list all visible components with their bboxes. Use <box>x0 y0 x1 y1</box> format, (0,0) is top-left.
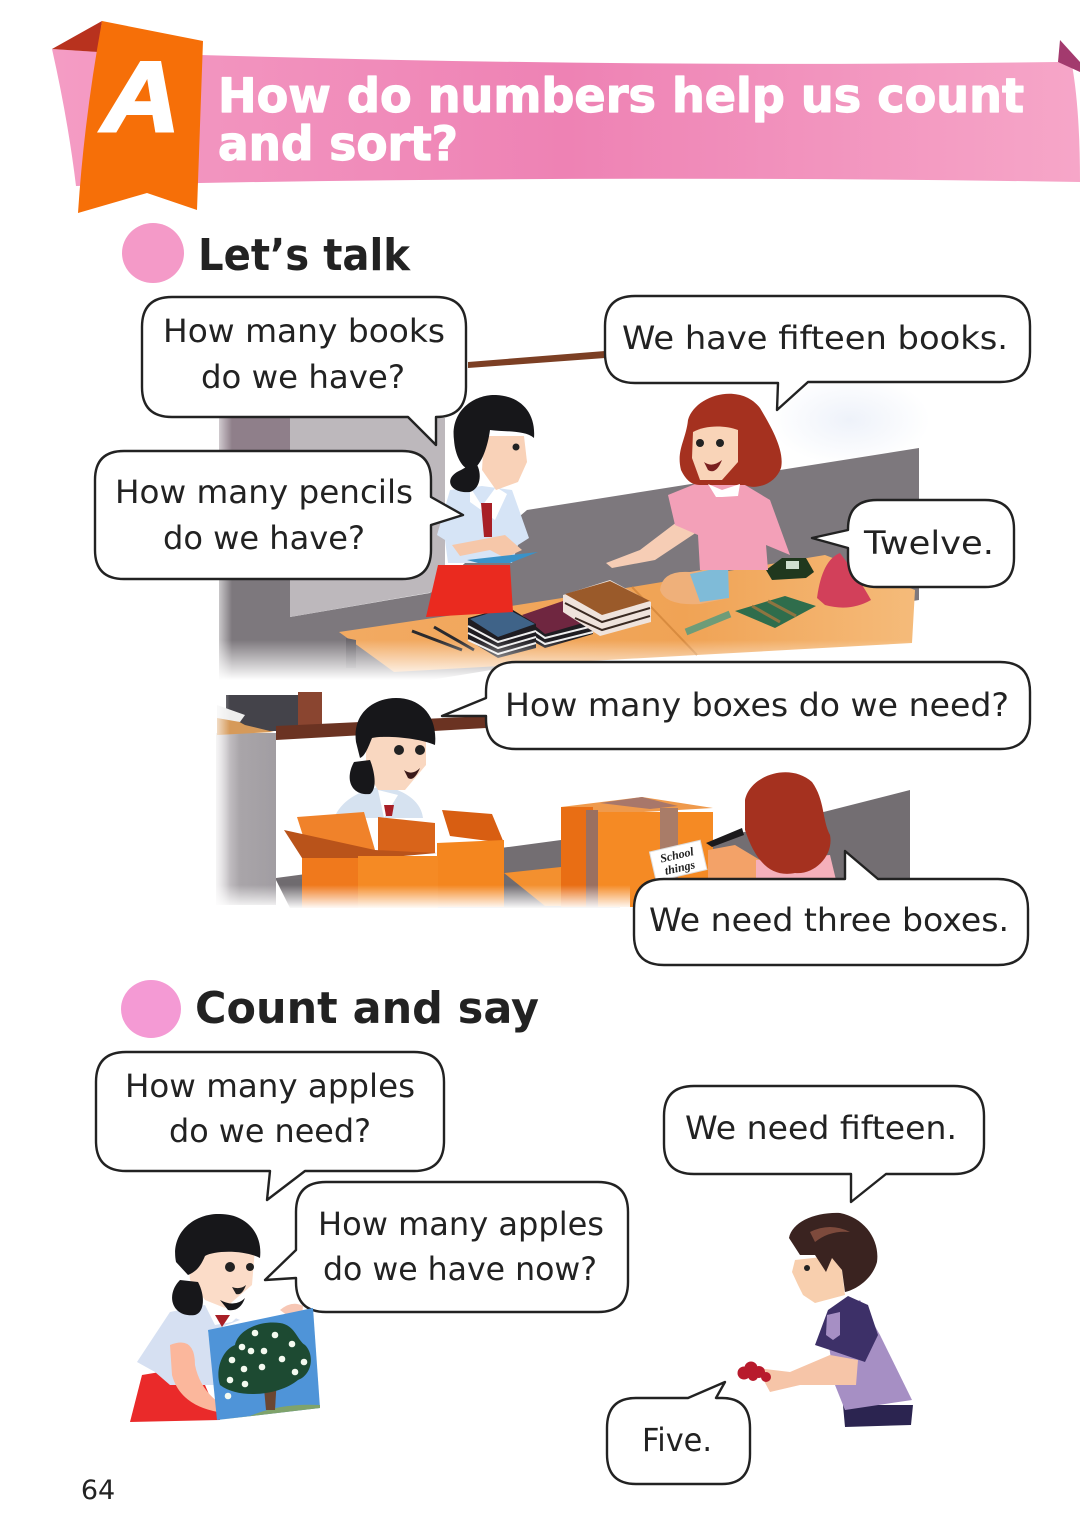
girl with red hair writing <box>706 772 836 880</box>
speech bubble: how many books <box>142 297 466 445</box>
speech bubble: apples need: do we need? <box>169 1112 371 1150</box>
speech bubble: five <box>607 1382 750 1484</box>
speech bubble: three boxes <box>634 851 1028 965</box>
girl with black hair and tablet <box>426 395 538 617</box>
scene fade <box>210 885 630 909</box>
title banner <box>52 21 1080 213</box>
speech bubble: how many pencils: How many pencils <box>115 473 413 511</box>
pencils and objects <box>412 553 871 650</box>
section heading: Count and say: Count and say <box>195 983 539 1034</box>
speech bubble: how many books: do we have? <box>201 358 405 396</box>
speech bubble: twelve <box>812 500 1014 587</box>
grey walls <box>219 418 919 680</box>
speech bubble: apples need <box>96 1052 444 1200</box>
school things label: School <box>659 844 696 866</box>
speech bubble: apples now: do we have now? <box>323 1250 597 1288</box>
closed box <box>561 797 713 907</box>
speech bubble: apples need: How many apples <box>125 1067 415 1105</box>
apples in hand <box>738 1362 771 1382</box>
illustration: girl holding apple tree picture <box>130 1214 320 1422</box>
title banner: and sort? <box>218 117 458 172</box>
speech bubble: fifteen books <box>605 296 1030 410</box>
page number: 64 <box>81 1475 115 1506</box>
speech bubble: we need fifteen <box>664 1086 984 1202</box>
window shelf <box>217 692 486 740</box>
speech bubble: how many pencils: do we have? <box>163 519 365 557</box>
heading text: How do numbers help us count <box>218 69 1024 124</box>
section heading: Let's talk <box>122 223 412 283</box>
stacks of books <box>468 580 651 658</box>
speech bubble: how many books: How many books <box>163 312 445 350</box>
orange letter tab <box>78 21 203 213</box>
school things label <box>649 840 707 881</box>
speech bubble: fifteen books: We have fifteen books. <box>622 319 1008 357</box>
girl in pink blouse <box>606 394 790 570</box>
section heading: Let's talk: Let’s talk <box>198 230 412 281</box>
speech bubble: twelve: Twelve. <box>863 524 994 562</box>
illustration: classroom table scene <box>210 351 930 680</box>
speech bubble: how many pencils <box>95 451 463 579</box>
open boxes <box>284 810 504 908</box>
illustration: packing boxes scene <box>210 690 910 910</box>
ribbon <box>52 49 1080 186</box>
illustration: boy with apples <box>738 1213 913 1427</box>
speech bubble: apples now: How many apples <box>318 1205 604 1243</box>
speech bubble: apples now <box>265 1182 628 1312</box>
desk <box>339 555 915 672</box>
speech bubble: we need fifteen: We need fifteen. <box>685 1109 957 1147</box>
scene fade <box>210 640 930 680</box>
school things label: things <box>663 857 697 878</box>
girl behind boxes <box>334 698 435 818</box>
speech bubble: five: Five. <box>642 1421 712 1459</box>
speech bubble: three boxes: We need three boxes. <box>649 901 1009 939</box>
apple tree picture <box>208 1308 320 1420</box>
letter A: A <box>99 41 180 152</box>
speech bubble: how many boxes <box>442 662 1030 749</box>
speech bubble: how many boxes: How many boxes do we need? <box>505 686 1009 724</box>
